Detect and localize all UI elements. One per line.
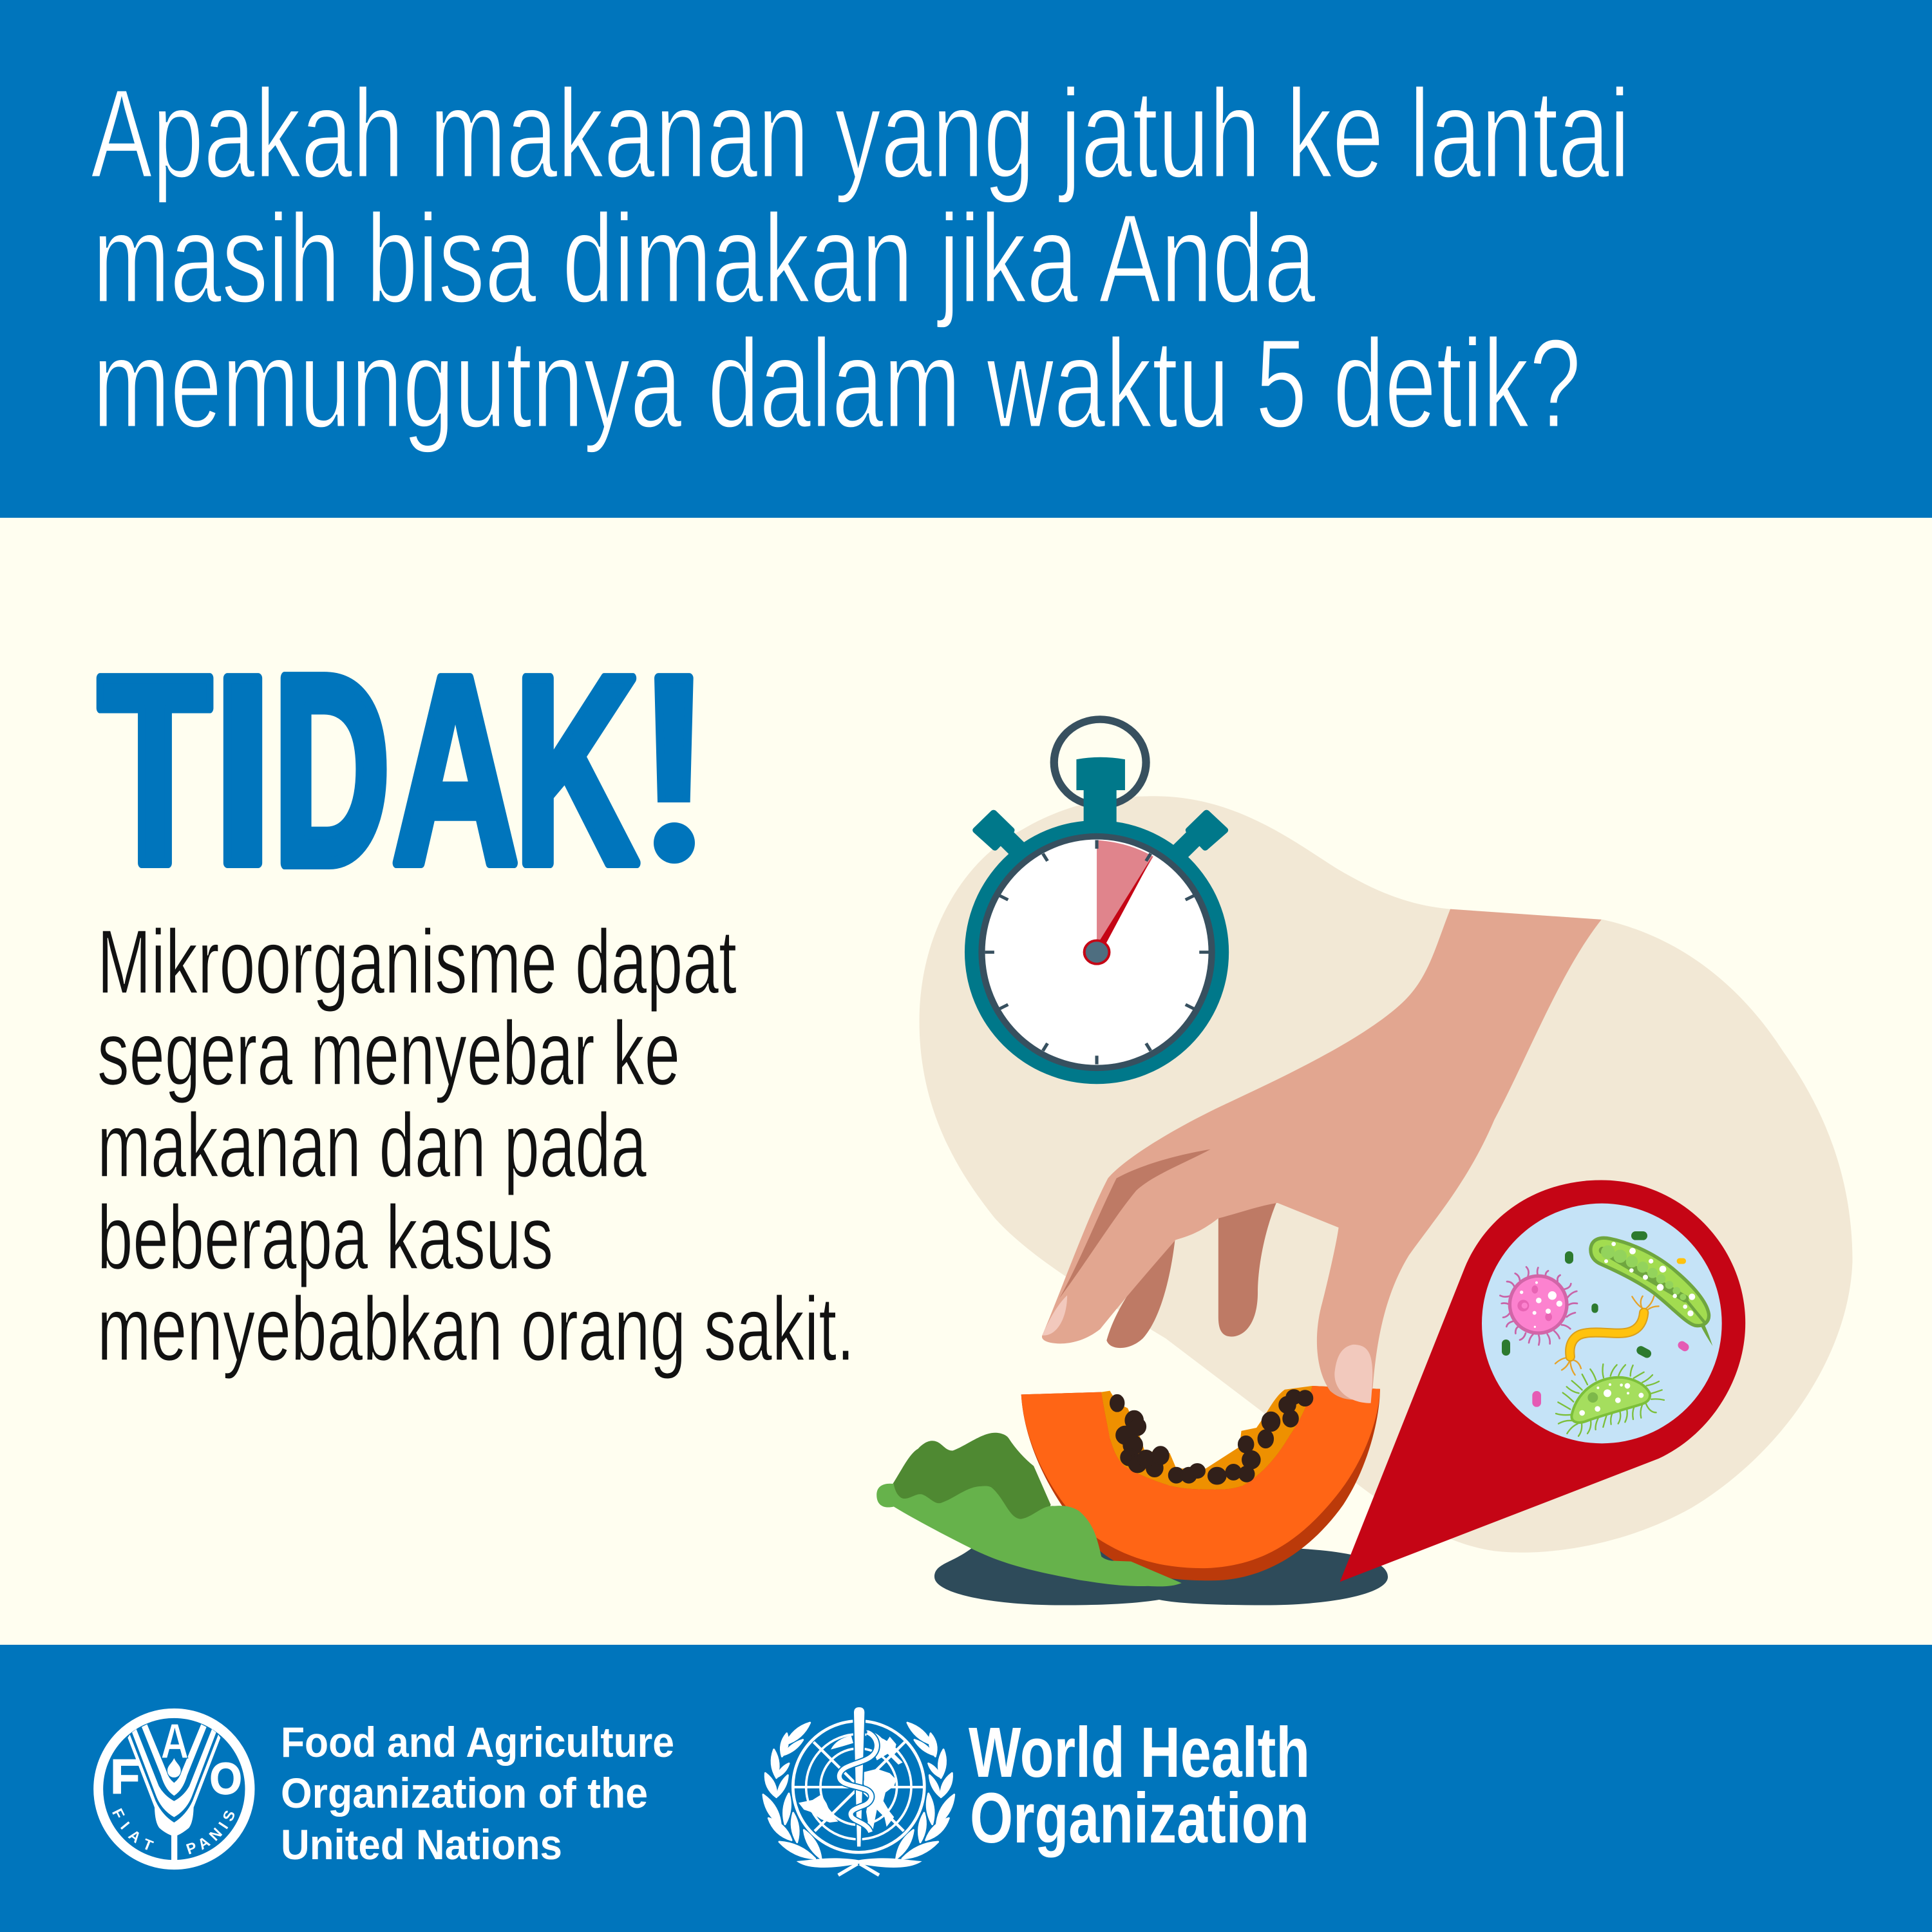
lettuce back leaf <box>893 1433 1051 1539</box>
papaya seeds <box>1110 1390 1312 1484</box>
heading: TIDAK: ! <box>638 621 710 920</box>
FAO letters: F <box>110 1749 140 1803</box>
red hand <box>1095 855 1153 954</box>
hand <box>1042 909 1602 1403</box>
elapsed wedge <box>1097 840 1153 952</box>
thumbnail <box>1334 1345 1372 1403</box>
papaya <box>1021 1386 1380 1580</box>
green cilia microbe <box>1556 1364 1664 1436</box>
middle finger <box>1218 1200 1278 1336</box>
heading: TIDAK: T <box>98 621 212 920</box>
lens background <box>1482 1204 1722 1443</box>
center pin <box>1084 940 1109 964</box>
WHO laurel left <box>763 1723 821 1859</box>
WHO name: World Health <box>969 1713 1310 1792</box>
right button <box>1176 813 1225 856</box>
body text: makanan dan pada <box>97 1094 647 1196</box>
FAO letters: O <box>210 1754 242 1803</box>
FAO motto: PANIS <box>185 1811 234 1855</box>
stopwatch ring <box>1054 719 1146 806</box>
body text: segera menyebar ke <box>97 1002 680 1104</box>
ring finger <box>1106 1234 1176 1348</box>
WHO ribbon <box>797 1858 922 1875</box>
stopwatch case <box>965 820 1229 1084</box>
ticks <box>985 840 1209 1065</box>
FAO name: United Nations <box>281 1821 562 1868</box>
WHO snake <box>839 1732 876 1832</box>
FAO letters <box>110 1714 242 1803</box>
magnifier pin <box>1340 1180 1745 1582</box>
heading: TIDAK: A <box>392 621 519 920</box>
WHO logo <box>763 1707 954 1875</box>
yellow worm microbe <box>1555 1296 1659 1375</box>
title <box>91 63 1630 454</box>
FAO letters: A <box>160 1714 189 1769</box>
body text <box>97 911 855 1379</box>
heading: TIDAK: I <box>213 621 272 920</box>
illustration <box>876 719 1853 1605</box>
body text: Mikroorganisme dapat <box>97 911 737 1012</box>
WHO name: Organization <box>970 1779 1309 1858</box>
FAO motto <box>112 1808 234 1855</box>
body text: beberapa kasus <box>97 1186 553 1288</box>
FAO motto: FIAT <box>112 1808 155 1850</box>
green pod microbe <box>1591 1238 1712 1346</box>
papaya pulp <box>1101 1386 1312 1490</box>
FAO wheat <box>128 1724 220 1860</box>
FAO name <box>281 1718 674 1868</box>
FAO name: Food and Agriculture <box>281 1718 674 1766</box>
footer band <box>0 1645 1932 1932</box>
fingernail <box>1042 1295 1067 1336</box>
pink microbe <box>1500 1267 1577 1345</box>
header band <box>0 0 1932 518</box>
heading: TIDAK <box>97 672 695 869</box>
FAO drop <box>167 1758 181 1777</box>
microbes lens <box>1482 1204 1722 1443</box>
WHO name <box>969 1713 1310 1858</box>
FAO name: Organization of the <box>281 1769 648 1817</box>
palm and thumb <box>1042 909 1602 1399</box>
WHO continents <box>799 1730 903 1831</box>
WHO globe <box>793 1721 924 1852</box>
stopwatch face <box>985 839 1209 1065</box>
background blob <box>920 796 1853 1553</box>
FAO ring <box>99 1713 250 1865</box>
WHO staff <box>853 1707 865 1847</box>
FAO logo <box>93 1708 255 1870</box>
stopwatch <box>965 719 1229 1084</box>
rod bacteria <box>1502 1231 1690 1407</box>
WHO laurel right <box>896 1723 954 1859</box>
heading: TIDAK: K <box>514 621 639 920</box>
body text: menyebabkan orang sakit. <box>97 1278 855 1379</box>
heading: TIDAK: D <box>274 621 390 920</box>
hand crease <box>1059 1150 1211 1298</box>
left button <box>976 813 1025 856</box>
stopwatch crown <box>1076 757 1125 827</box>
title: masih bisa dimakan jika Anda <box>93 188 1316 329</box>
lettuce front leaf <box>876 1484 1182 1586</box>
ground shadow <box>934 1548 1388 1605</box>
